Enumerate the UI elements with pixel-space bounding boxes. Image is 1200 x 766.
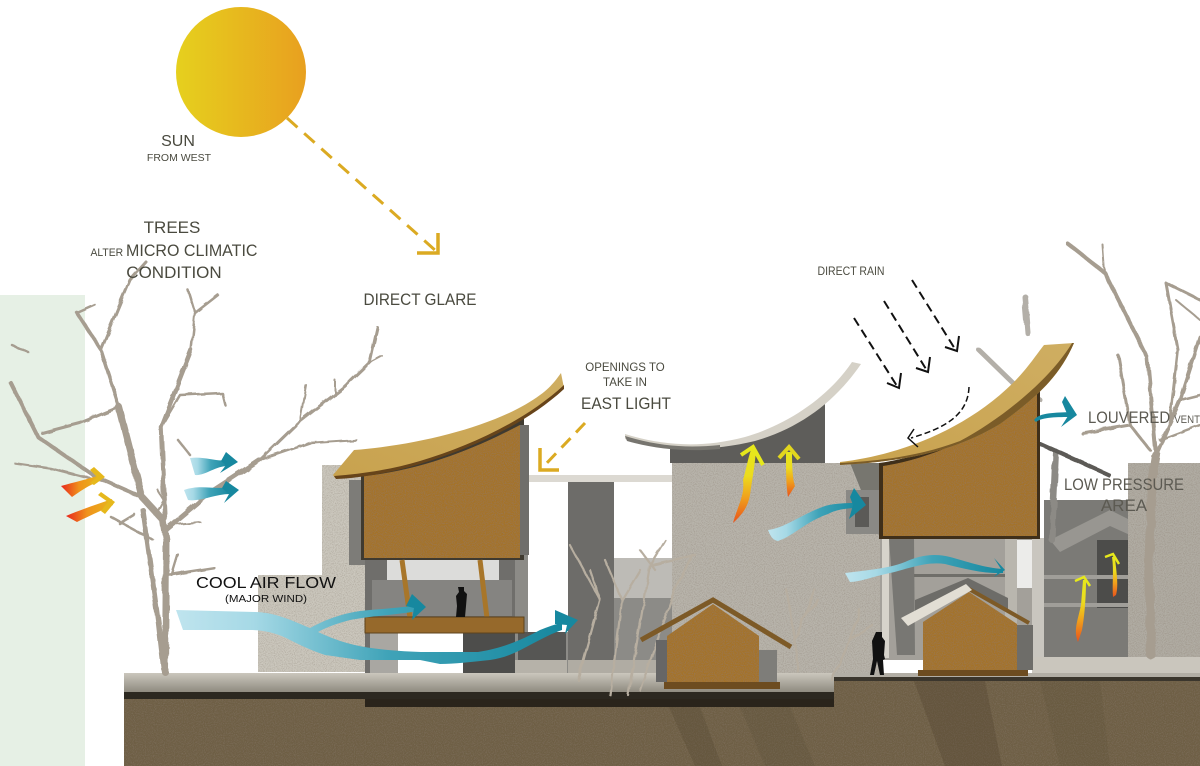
small house B: [901, 584, 1033, 676]
direct glare label: DIRECT GLARE: [364, 290, 476, 309]
openings label: TAKE IN: [603, 377, 647, 389]
right house: [840, 343, 1074, 539]
trees label: ALTER MICRO CLIMATIC: [90, 241, 258, 260]
small house A: [641, 600, 791, 689]
cool air flow label: [196, 575, 337, 605]
direct rain label: DIRECT RAIN: [818, 266, 884, 278]
background building: interior under left house: [365, 555, 530, 685]
left house: [333, 373, 564, 633]
openings label: OPENINGS TO: [585, 362, 665, 374]
background building: right bay: [1032, 463, 1200, 674]
openings label: [581, 362, 671, 413]
trees label: TREES: [144, 218, 200, 237]
green background panel: [0, 295, 85, 766]
sun label: SUN: [161, 133, 195, 150]
openings label: EAST LIGHT: [581, 394, 671, 413]
right tree: [979, 243, 1200, 655]
low pressure label: LOW PRESSURE: [1064, 475, 1184, 494]
trees label: CONDITION: [126, 263, 222, 282]
arrow: east light: [540, 423, 585, 470]
person walking: [870, 632, 885, 675]
background building: left wall: [258, 465, 365, 672]
background building: middle bay: [515, 475, 672, 684]
sun label: [147, 133, 212, 164]
sun: [176, 7, 306, 137]
arrow: direct glare: [287, 118, 438, 253]
background building: structure under right house: [846, 463, 1044, 660]
person on platform: [456, 587, 467, 617]
arrows: rising heat: [733, 447, 1119, 642]
arrows: warm air through tree: [61, 467, 115, 522]
small tree cluster: [570, 540, 872, 695]
sun label: FROM WEST: [147, 152, 212, 164]
ground: [124, 673, 1200, 766]
arrows: direct rain: [854, 280, 969, 447]
background building: main wall: [672, 463, 880, 680]
arrows: cool air through tree: [184, 452, 239, 503]
cool air flow label: (MAJOR WIND): [225, 593, 307, 605]
low pressure label: AREA: [1101, 496, 1148, 515]
left tree: [11, 262, 382, 672]
cool air flow label: COOL AIR FLOW: [196, 575, 337, 592]
arrows: cool air around right house: [768, 396, 1077, 582]
trees label: [90, 218, 258, 282]
background roof and shadow: [625, 362, 861, 463]
arrow: cool air flow: [176, 594, 578, 664]
low pressure label: [1064, 475, 1184, 515]
